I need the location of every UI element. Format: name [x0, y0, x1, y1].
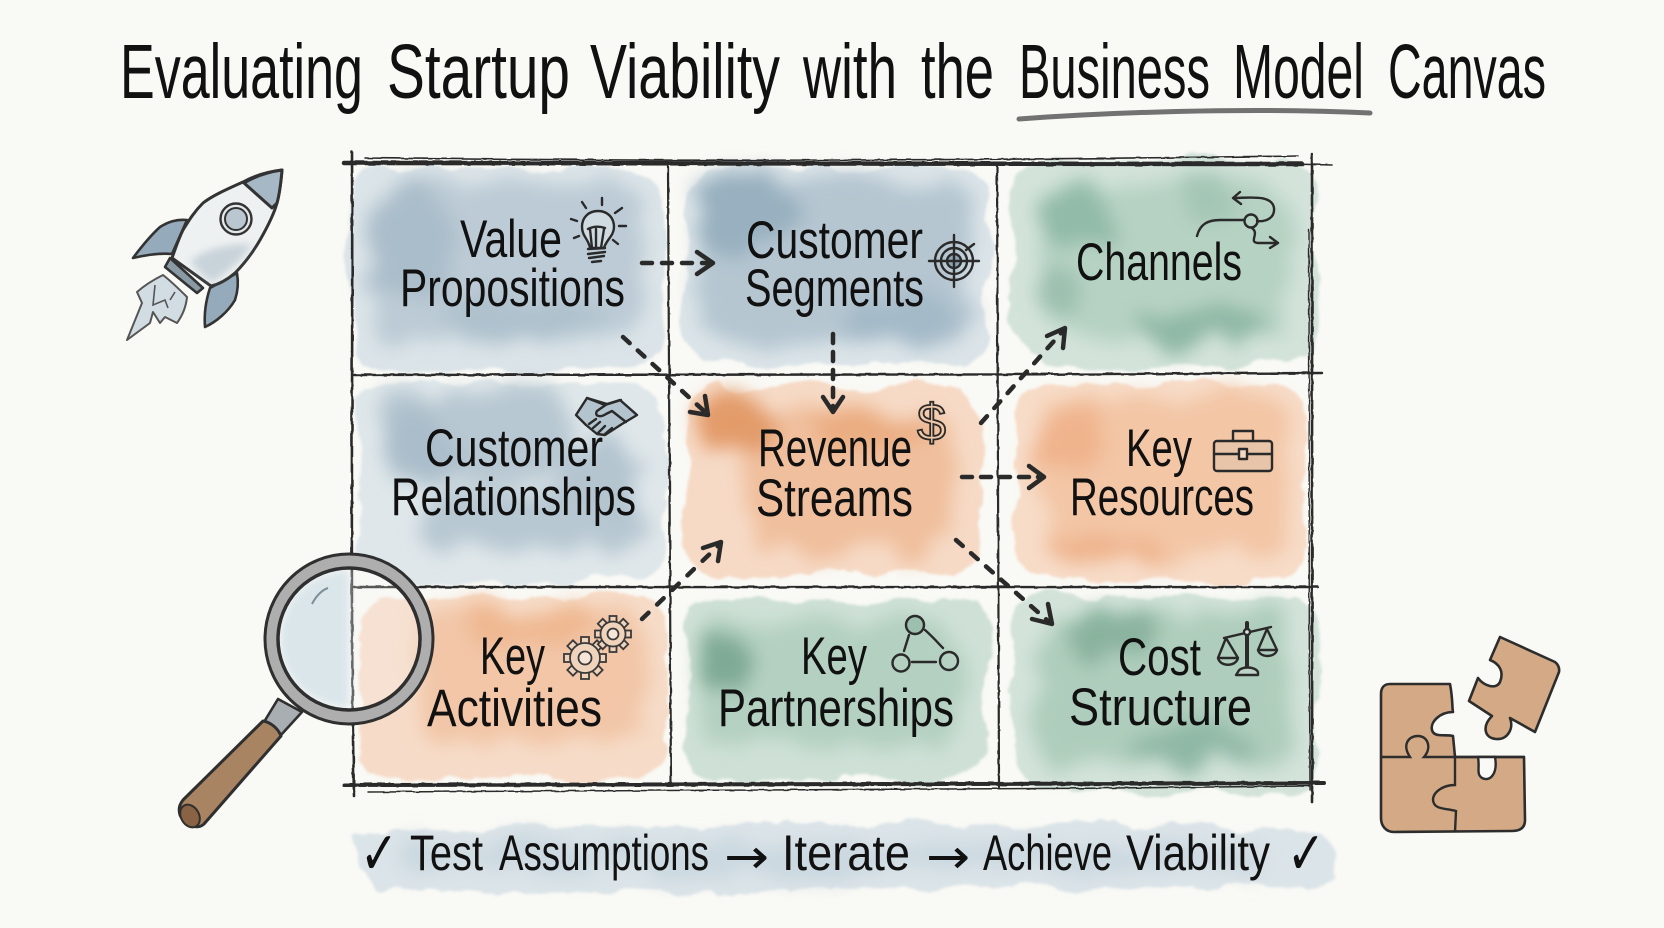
- rocket nozzle: [165, 258, 203, 293]
- panel: key partnerships wash: [684, 600, 988, 780]
- canvas grid: [344, 152, 1332, 802]
- panel: channels wash: [1012, 160, 1318, 366]
- title: Startup: [387, 29, 570, 115]
- title underline brush stroke: [1019, 111, 1370, 119]
- puzzle loose piece: [1469, 637, 1559, 739]
- icon: handshake: [576, 398, 637, 435]
- rocket porthole: [220, 204, 252, 234]
- label: customer segments: Segments: [745, 259, 924, 318]
- gear small: [595, 616, 631, 652]
- label: value propositions: Value: [460, 210, 562, 269]
- icon: briefcase: [1214, 431, 1272, 471]
- panel: revenue streams wash: [686, 386, 982, 572]
- rocket body: [172, 170, 282, 286]
- panel: customer relationships wash: [358, 382, 666, 580]
- icon: rocket: [127, 170, 282, 340]
- handle end: [176, 801, 204, 831]
- panel: key resources wash: [1016, 384, 1306, 580]
- arrows: dashed flow connectors: [623, 252, 1065, 624]
- rocket left fin: [133, 220, 187, 258]
- label: cost structure: Structure: [1069, 678, 1252, 737]
- ring: [272, 561, 426, 717]
- arrow: revenue streams to channels: [981, 328, 1065, 423]
- puzzle assembled pieces: [1381, 684, 1525, 832]
- banner text: ✓: [360, 819, 398, 889]
- label: key activities: [427, 627, 602, 738]
- icon: balance scales: [1218, 623, 1277, 675]
- label: revenue streams: Revenue: [758, 419, 912, 478]
- label: key partnerships: [718, 627, 954, 738]
- title: [120, 29, 1546, 115]
- label: customer segments: Customer: [746, 211, 923, 270]
- icon: partner network: [892, 616, 958, 672]
- label: key activities: Activities: [427, 679, 602, 738]
- panel: cost structure wash: [1014, 596, 1318, 792]
- icon: channels route arrows: [1197, 192, 1278, 248]
- title: with: [802, 29, 897, 115]
- icon: gears: [564, 616, 631, 679]
- arrow: value propositions to revenue streams: [623, 337, 708, 415]
- label: revenue streams: Streams: [756, 469, 913, 528]
- panel: value propositions wash: [352, 168, 664, 368]
- lens tint: [280, 570, 349, 708]
- label: value propositions: Propositions: [400, 259, 625, 318]
- label: customer segments: [745, 211, 924, 318]
- arrow: customer segments to revenue streams: [823, 334, 843, 412]
- puzzle notch: [1478, 757, 1496, 779]
- icon: magnifying glass: [176, 554, 433, 831]
- label: key resources: Resources: [1070, 468, 1254, 527]
- banner text: Assumptions: [499, 825, 709, 881]
- banner text: →: [926, 829, 970, 885]
- label: customer relationships: Relationships: [391, 468, 636, 527]
- cell labels: [391, 210, 1254, 738]
- title: Evaluating: [120, 29, 363, 115]
- icon: light bulb: [571, 198, 626, 262]
- banner wash: [346, 824, 1334, 893]
- banner text: →: [724, 829, 769, 885]
- label: channels: Channels: [1076, 233, 1242, 292]
- label: key resources: Key: [1126, 419, 1192, 478]
- gear large: [564, 637, 606, 679]
- label: value propositions: [400, 210, 625, 318]
- label: cost structure: Cost: [1118, 628, 1201, 687]
- title: Business: [1019, 29, 1210, 115]
- rocket nose cone: [244, 170, 282, 208]
- puzzle seams: [1381, 736, 1525, 832]
- icon: jigsaw puzzle: [1381, 637, 1559, 832]
- title: Viability: [590, 29, 780, 115]
- banner text: Achieve: [983, 825, 1112, 881]
- label: cost structure: [1069, 628, 1252, 737]
- rocket right fin: [205, 273, 238, 327]
- rocket shading: [190, 244, 252, 282]
- label: key partnerships: Partnerships: [718, 679, 954, 738]
- icon: target: [929, 235, 979, 287]
- arrow: value propositions to customer segments: [642, 252, 713, 274]
- label: key partnerships: Key: [801, 627, 867, 686]
- title: the: [921, 29, 994, 115]
- icon: dollar sign: $: [917, 394, 946, 452]
- label: revenue streams: [756, 419, 913, 528]
- lens: [277, 568, 421, 712]
- label: customer relationships: [391, 419, 636, 527]
- banner text: Iterate: [782, 825, 910, 881]
- label: key activities: Key: [480, 627, 545, 686]
- neck: [264, 699, 302, 735]
- title: Model: [1233, 29, 1364, 115]
- arrow: revenue streams to key resources: [962, 466, 1044, 488]
- banner text: [360, 819, 1325, 889]
- wooden handle: [179, 721, 281, 827]
- banner text: ✓: [1287, 819, 1325, 889]
- lens highlight: [312, 588, 328, 604]
- label: customer relationships: Customer: [425, 419, 603, 478]
- arrow: key activities to revenue streams: [642, 542, 721, 619]
- rocket flame: [127, 275, 187, 340]
- arrow: revenue streams to cost structure: [956, 540, 1052, 624]
- banner text: Viability: [1126, 825, 1270, 881]
- banner text: Test: [410, 825, 483, 881]
- panel: customer segments wash: [686, 168, 988, 364]
- rocket flame inner lines: [153, 285, 175, 308]
- banner: test iterate achieve: [346, 819, 1334, 893]
- title: Canvas: [1388, 29, 1546, 115]
- label: key resources: [1070, 419, 1254, 527]
- panel: key activities wash: [362, 596, 666, 778]
